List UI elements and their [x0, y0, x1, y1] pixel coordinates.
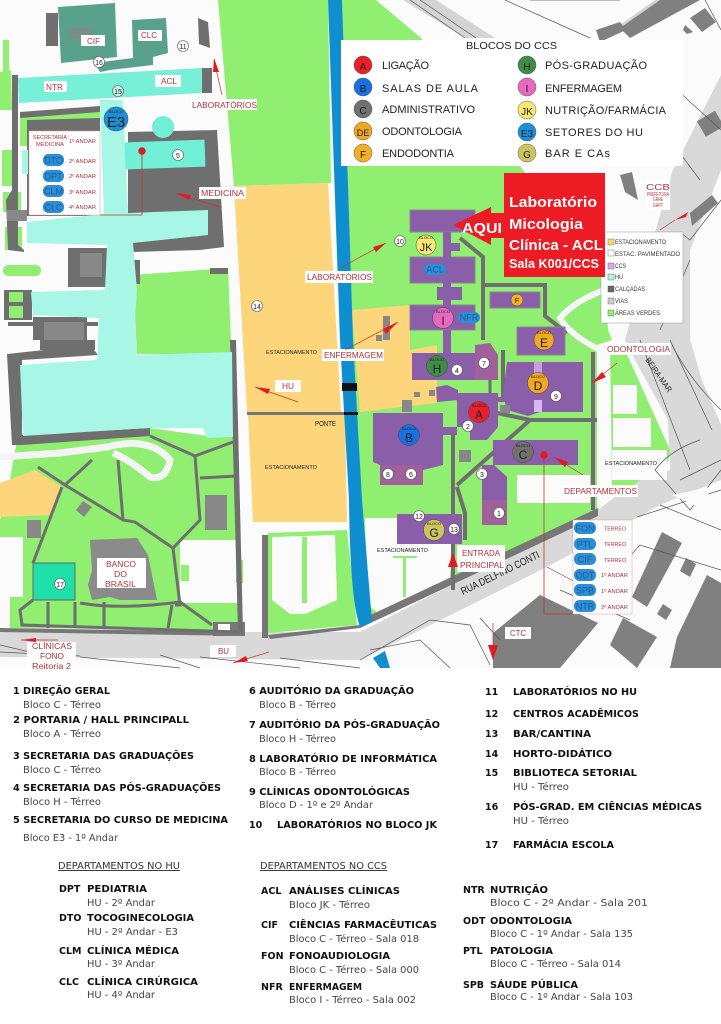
callout: departamentos floors: TERREO: [604, 558, 627, 564]
bridge and grey road edges: [0, 412, 598, 639]
Banco do Brasil building: [88, 538, 157, 600]
callout: secretaria medicina floors: CLM: [44, 186, 63, 196]
callout: departamentos floors: TERREO: [604, 542, 627, 548]
marker numbers: 6: [409, 472, 413, 479]
list: locais column 2: Bloco H - Térreo: [259, 734, 336, 745]
list: locais column 1: Bloco A - Térreo: [23, 729, 101, 740]
white label boxes with red text: ENTRADA: [462, 548, 500, 558]
campus map: [0, 0, 721, 671]
list: departamentos no CCS column 2: Bloco C - Térreo - Sala 014: [490, 959, 621, 970]
list: locais column 1: 4 SECRETARIA DAS PÓS-GRADUAÇÕES: [13, 782, 221, 794]
legend: map colours: CALÇADAS: [615, 287, 645, 293]
river: [328, 0, 372, 627]
callout: Laboratório Micologia Clínica - ACL: Micologia: [509, 216, 584, 233]
white label boxes with red text: Reitoria 2: [32, 661, 71, 671]
block marker letters: D: [534, 379, 543, 393]
block marker letters: BLOCO: [537, 330, 551, 335]
road: Rua Delfino Conti and Beira-Mar: [0, 75, 721, 660]
green areas: [0, 0, 670, 633]
white label boxes with red text: BRASIL: [105, 579, 136, 589]
list: locais column 2: LABORATÓRIOS NO BLOCO JK: [277, 819, 438, 831]
white label boxes with red text: CLC: [141, 30, 157, 40]
block marker letters: E3: [107, 114, 125, 131]
list: departamentos no HU: HU - 2º Andar: [87, 898, 155, 909]
road linework: [0, 0, 721, 668]
small grey blocks: [376, 316, 510, 462]
list: locais column 3: HU - Térreo: [513, 782, 569, 793]
list: departamentos no CCS column 2: PATOLOGIA: [490, 946, 554, 957]
legend: blocos do CCS: ENDODONTIA: [382, 148, 455, 160]
legend: blocos do CCS: PÓS-GRADUAÇÃO: [545, 59, 647, 72]
list: departamentos no CCS column 1: ENFERMAGEM: [289, 982, 362, 993]
marker numbers: 5: [176, 153, 180, 160]
callout: departamentos floors: ODT: [576, 570, 595, 580]
callout: secretaria medicina floors: CLC: [44, 202, 63, 212]
white label boxes with red text: GHPT: [653, 203, 663, 209]
white label boxes with red text: [27, 30, 671, 671]
teal buildings CIF and CLC: [58, 3, 168, 72]
block marker letters: BLOCO: [516, 443, 530, 448]
callout: departamentos floors: PTL: [577, 540, 593, 550]
callout: departamentos floors: SPB: [576, 586, 594, 596]
list: departamentos no CCS column 1: FONOAUDIOLOGIA: [289, 951, 391, 962]
parking labels: [265, 350, 658, 554]
list: locais column 3: HU - Térreo: [513, 816, 569, 827]
HU paths and loop road: [0, 436, 240, 632]
list: locais column 3: 17: [485, 840, 498, 851]
marker numbers: [56, 44, 558, 589]
red location arrows: [21, 58, 688, 663]
block marker letters: B: [405, 431, 413, 445]
callout: Laboratório Micologia Clínica - ACL: Clínica - ACL: [509, 237, 603, 254]
marker numbers: 14: [253, 304, 261, 311]
legend: blocos do CCS: F: [360, 150, 366, 161]
block marker letters: C: [519, 448, 528, 462]
white label boxes with red text: LABORATÓRIOS: [307, 272, 372, 282]
marker numbers: 13: [450, 527, 458, 534]
white label boxes with red text: LABORATÓRIOS: [192, 100, 257, 110]
marker numbers: 2: [466, 424, 470, 431]
legend: map colours: ESTAC. PAVIMENTADO: [615, 252, 680, 258]
block marker letters: BLOCO: [472, 403, 486, 408]
list: departamentos no CCS column 2: NUTRIÇÃO: [490, 885, 548, 896]
list: locais column 3: 11: [485, 687, 498, 698]
legend: map colours: CCS: [615, 264, 626, 270]
callout: departamentos floors: [540, 451, 632, 614]
list: departamentos no HU: CLÍNICA MÉDICA: [87, 945, 180, 957]
legend: blocos do CCS: A: [360, 62, 367, 73]
north buildings: [596, 0, 721, 226]
parking labels: ESTACIONAMENTO: [266, 350, 318, 356]
legend: blocos do CCS: LIGAÇÃO: [382, 59, 429, 72]
list: locais column 1: 3 SECRETARIA DAS GRADUAÇÕES: [13, 750, 194, 762]
legend: blocos do CCS: BAR E CAs: [545, 148, 610, 160]
callout: secretaria medicina floors: 3º ANDAR: [69, 189, 96, 196]
block marker letters: G: [429, 526, 439, 540]
callout: secretaria medicina floors: MEDICINA: [36, 142, 64, 148]
callout: departamentos floors: 1º ANDAR: [601, 572, 628, 579]
block marker letters: [107, 109, 551, 540]
legend: map colours: ESTACIONAMENTO: [615, 240, 666, 246]
legend: blocos do CCS: H: [523, 62, 531, 73]
marker numbers: 3: [480, 472, 484, 479]
list: departamentos no CCS column 1: CIF: [261, 920, 278, 931]
callout: Laboratório Micologia Clínica - ACL: Sala K001/CCS: [509, 257, 599, 271]
callout: Laboratório Micologia Clínica - ACL: Laboratório: [509, 194, 597, 211]
legend: blocos do CCS: DE: [357, 128, 369, 138]
green strips inside parking: [181, 537, 417, 603]
parking labels: PONTE: [315, 421, 336, 428]
marker numbers: 1: [497, 511, 501, 518]
list: locais column 2: Bloco B - Térreo: [259, 700, 336, 711]
list: locais column 3: 16: [485, 802, 499, 813]
marker numbers: 10: [396, 239, 404, 246]
white label boxes with red text: ENFERMAGEM: [324, 350, 383, 360]
white label boxes with red text: PREFEITURA: [647, 192, 669, 198]
callout: AQUI arrow: AQUI: [462, 221, 502, 237]
legend: blocos do CCS: BLOCOS DO CCS: [466, 40, 557, 52]
legend: blocos do CCS: E3: [521, 129, 534, 140]
list: departamentos no HU: CLC: [59, 977, 79, 988]
block marker letters: I: [441, 314, 445, 328]
list: departamentos no CCS column 1: Bloco C - Térreo - Sala 018: [289, 934, 419, 945]
callout: secretaria medicina floors: 4º ANDAR: [69, 204, 96, 211]
white parking areas: [0, 385, 667, 617]
legend: blocos do CCS: B: [360, 84, 367, 95]
block marker letters: BLOCO: [531, 374, 545, 379]
callout: secretaria medicina floors: 1º ANDAR: [69, 138, 96, 145]
list: locais column 1: Bloco H - Térreo: [23, 797, 101, 808]
legend: blocos do CCS: C: [359, 106, 367, 117]
marker numbers: 15: [114, 89, 122, 96]
white label boxes with red text: ACL: [161, 76, 177, 86]
white label boxes with red text: GRHE: [653, 197, 663, 203]
callout: departamentos floors: NTR: [576, 602, 595, 612]
callout: departamentos floors: 1º ANDAR: [601, 588, 628, 595]
block marker letters: BLOCO: [430, 357, 444, 362]
parking lots: [0, 183, 437, 522]
aqua HU wings: [20, 100, 233, 438]
list: departamentos no CCS column 1: Bloco C - Térreo - Sala 000: [289, 965, 419, 976]
list: departamentos no CCS column 2: Bloco C - 1º Andar - Sala 103: [490, 992, 633, 1003]
list: locais column 3: 13: [485, 729, 498, 740]
parking labels: ESTACIONAMENTO: [605, 461, 658, 467]
list: departamentos no CCS column 2: ODONTOLOGIA: [490, 916, 573, 927]
legend: blocos do CCS: SALAS DE AULA: [382, 83, 479, 95]
list: departamentos no CCS column 1: ANÁLISES CLÍNICAS: [289, 885, 400, 897]
list: locais column 2: 7 AUDITÓRIO DA PÓS-GRADUAÇÃO: [249, 719, 440, 731]
legend: blocos do CCS: ADMINISTRATIVO: [382, 104, 475, 116]
legend: blocos do CCS: G: [523, 150, 531, 161]
list: locais column 1: 1 DIREÇÃO GERAL: [13, 686, 110, 697]
block marker letters: BLOCO: [419, 235, 433, 240]
list: locais column 2: 8 LABORATÓRIO DE INFORMÁTICA: [249, 753, 438, 765]
parking labels: ESTACIONAMENTO: [265, 465, 318, 471]
list: departamentos no CCS column 1: [260, 861, 437, 1006]
label: Beira-Mar: BEIRA-MAR: [643, 356, 674, 394]
list: locais column 3: HORTO-DIDÁTICO: [513, 748, 612, 760]
list: departamentos no HU: [58, 861, 199, 1001]
block marker letters: BLOCO: [109, 109, 123, 114]
list: departamentos no HU: PEDIATRIA: [87, 884, 148, 895]
callout: departamentos floors: 2º ANDAR: [601, 604, 628, 611]
legend: map colours: ÁREAS VERDES: [615, 310, 660, 317]
list: locais column 3: 14: [485, 749, 499, 760]
marker numbers: 11: [179, 44, 187, 51]
list: locais column 1: Bloco C - Térreo: [23, 700, 101, 711]
list: locais column 3: [485, 686, 702, 851]
marker numbers: 4: [455, 368, 459, 375]
list: departamentos no CCS column 2: ODT: [463, 916, 486, 927]
marker numbers: 7: [482, 361, 486, 368]
white label boxes with red text: DEPARTAMENTOS: [564, 486, 637, 496]
numbered markers: [54, 40, 562, 590]
list: departamentos no CCS column 2: Bloco C - 2º Andar - Sala 201: [490, 898, 648, 909]
list: departamentos no HU: DTO: [59, 913, 81, 924]
list: locais column 1: [13, 686, 229, 844]
list: locais column 1: 2 PORTARIA / HALL PRINCIPALL: [13, 715, 189, 726]
legend: blocos do CCS: ODONTOLOGIA: [382, 126, 463, 138]
white label boxes with red text: CLÍNICAS: [32, 641, 72, 651]
list: locais column 1: 5 SECRETARIA DO CURSO DE MEDICINA: [13, 815, 229, 826]
block marker letters: E: [540, 336, 548, 350]
white label boxes with red text: BU: [218, 646, 229, 656]
parking labels: ESTACIONAMENTO: [377, 548, 429, 554]
list: locais column 2: 10: [249, 820, 263, 831]
white label boxes with red text: BANCO: [106, 559, 136, 569]
callout: AQUI arrow: [453, 207, 505, 245]
white label boxes with red text: NTR: [46, 82, 63, 92]
marker numbers: 17: [56, 582, 64, 589]
label: Rua Delfino Conti: RUA DELFINO CONTI: [459, 549, 542, 598]
list: departamentos no HU: HU - 3º Andar: [87, 959, 155, 970]
list: departamentos no CCS column 2: SÁUDE PÚBLICA: [490, 979, 579, 991]
white label boxes with red text: ODONTOLOGIA: [607, 344, 670, 354]
list: departamentos no HU: HU - 2º Andar - E3: [87, 927, 178, 938]
list: departamentos no CCS column 2: Bloco C - 1º Andar - Sala 135: [490, 929, 633, 940]
white label boxes with red text: CCB: [646, 182, 670, 192]
list: departamentos no CCS column 1: CIÊNCIAS FARMACÊUTICAS: [289, 919, 437, 931]
list: departamentos no CCS column 2: PTL: [463, 946, 482, 957]
HU interior grey blocks: [7, 210, 227, 538]
legend: blocos do CCS: NUTRIÇÃO/FARMÁCIA: [545, 104, 667, 117]
list: locais column 3: CENTROS ACADÊMICOS: [513, 708, 639, 720]
callout: secretaria medicina floors: 2º ANDAR: [69, 158, 96, 165]
white label boxes with red text: DO: [114, 569, 127, 579]
list: locais column 2: 6 AUDITÓRIO DA GRADUAÇÃO: [249, 685, 414, 697]
white label boxes with red text: MEDICINA: [201, 188, 244, 198]
list: departamentos no HU: DEPARTAMENTOS NO HU: [58, 861, 180, 872]
list: locais column 2: Bloco B - Térreo: [259, 767, 336, 778]
white label boxes with red text: CTC: [510, 628, 526, 638]
callout: secretaria medicina floors: SECRETARIA: [33, 135, 67, 141]
white label boxes with red text: FONO: [40, 651, 64, 661]
list: locais column 3: 12: [485, 709, 498, 720]
list: locais column 2: 9 CLÍNICAS ODONTOLÓGICAS: [249, 786, 410, 798]
farmacia escola: [33, 563, 75, 600]
list: locais column 3: LABORATÓRIOS NO HU: [513, 686, 637, 698]
pills ACL and NFR: [424, 264, 480, 323]
list: departamentos no HU: CLM: [59, 946, 81, 957]
list: locais column 1: Bloco E3 - 1º Andar: [23, 833, 118, 844]
block markers on the map: [104, 107, 554, 540]
list: locais column 2: Bloco D - 1º e 2º Andar: [259, 800, 373, 811]
block marker letters: JK: [420, 242, 433, 254]
marker numbers: 8: [386, 472, 390, 479]
list: departamentos no CCS column 1: ACL: [261, 886, 281, 897]
block marker letters: H: [433, 362, 441, 376]
marker numbers: 9: [554, 394, 558, 401]
legend: blocos do CCS: JK: [521, 107, 533, 118]
list: departamentos no HU: CLÍNICA CIRÚRGICA: [87, 976, 199, 988]
list: departamentos no CCS column 1: FON: [261, 951, 284, 962]
list: locais column 3: 15: [485, 768, 498, 779]
legend: map colours: HU: [615, 275, 623, 281]
legend: map colours: [601, 232, 683, 323]
callout: secretaria medicina floors: 2º ANDAR: [69, 173, 96, 180]
list: departamentos no CCS column 1: Bloco I - Térreo - Sala 002: [289, 995, 416, 1006]
white label boxes with red text: PRINCIPAL: [460, 560, 504, 570]
HU buildings: [4, 3, 243, 632]
marker numbers: 16: [95, 60, 103, 67]
white label boxes with red text: HU: [282, 381, 294, 391]
list: departamentos no CCS column 1: NFR: [261, 982, 283, 993]
pills ACL and NFR: ACL: [426, 264, 444, 274]
pills ACL and NFR: NFR: [460, 312, 479, 322]
callout: secretaria medicina floors: DPT: [44, 172, 63, 182]
list: departamentos no HU: HU - 4º Andar: [87, 990, 155, 1001]
callout: departamentos floors: TERREO: [604, 526, 627, 532]
list: departamentos no CCS column 1: Bloco JK - Térreo: [289, 900, 370, 911]
list: locais column 3: PÓS-GRAD. EM CIÊNCIAS MÉDICAS: [513, 801, 702, 813]
list: departamentos no CCS column 2: NTR: [463, 885, 485, 896]
list: departamentos no CCS column 2: SPB: [463, 980, 484, 991]
list: departamentos no HU: TOCOGINECOLOGIA: [87, 913, 195, 924]
list: locais column 2: [249, 685, 440, 831]
block marker letters: F: [515, 298, 519, 305]
white label boxes with red text: CIF: [87, 36, 100, 46]
list: locais column 3: BAR/CANTINA: [513, 729, 592, 740]
marker numbers: 12: [415, 514, 423, 521]
block marker letters: BLOCO: [436, 309, 450, 314]
CCS paths: [453, 238, 597, 590]
legend: blocos do CCS: SETORES DO HU: [545, 127, 643, 139]
legend: blocos do CCS: [341, 40, 683, 166]
CCS purple buildings: [410, 210, 565, 355]
legend: blocos do CCS: ENFERMAGEM: [545, 83, 622, 95]
block marker letters: A: [475, 408, 483, 422]
list: locais column 1: Bloco C - Térreo: [23, 765, 101, 776]
list: departamentos no HU: DPT: [59, 884, 81, 895]
legend: blocos do CCS: I: [526, 84, 528, 95]
block marker letters: BLOCO: [427, 521, 441, 526]
list: locais column 3: FARMÁCIA ESCOLA: [513, 839, 615, 851]
callout: secretaria medicina floors: [29, 131, 146, 215]
block marker letters: BLOCO: [402, 426, 416, 431]
list: departamentos no CCS column 1: DEPARTAMENTOS NO CCS: [260, 861, 387, 872]
road: north grey strips: [403, 0, 690, 38]
list: departamentos no CCS column 2: [463, 885, 648, 1003]
callout: departamentos floors: FON: [576, 524, 594, 534]
callout: secretaria medicina floors: DTO: [44, 156, 63, 166]
callout: departamentos floors: CIF: [578, 554, 593, 564]
callout: Laboratório Micologia Clínica - ACL: [504, 173, 605, 277]
legend: map colours: VIAS: [615, 299, 628, 305]
CTC buildings: [493, 532, 721, 668]
list: locais column 3: BIBLIOTECA SETORIAL: [513, 768, 637, 779]
